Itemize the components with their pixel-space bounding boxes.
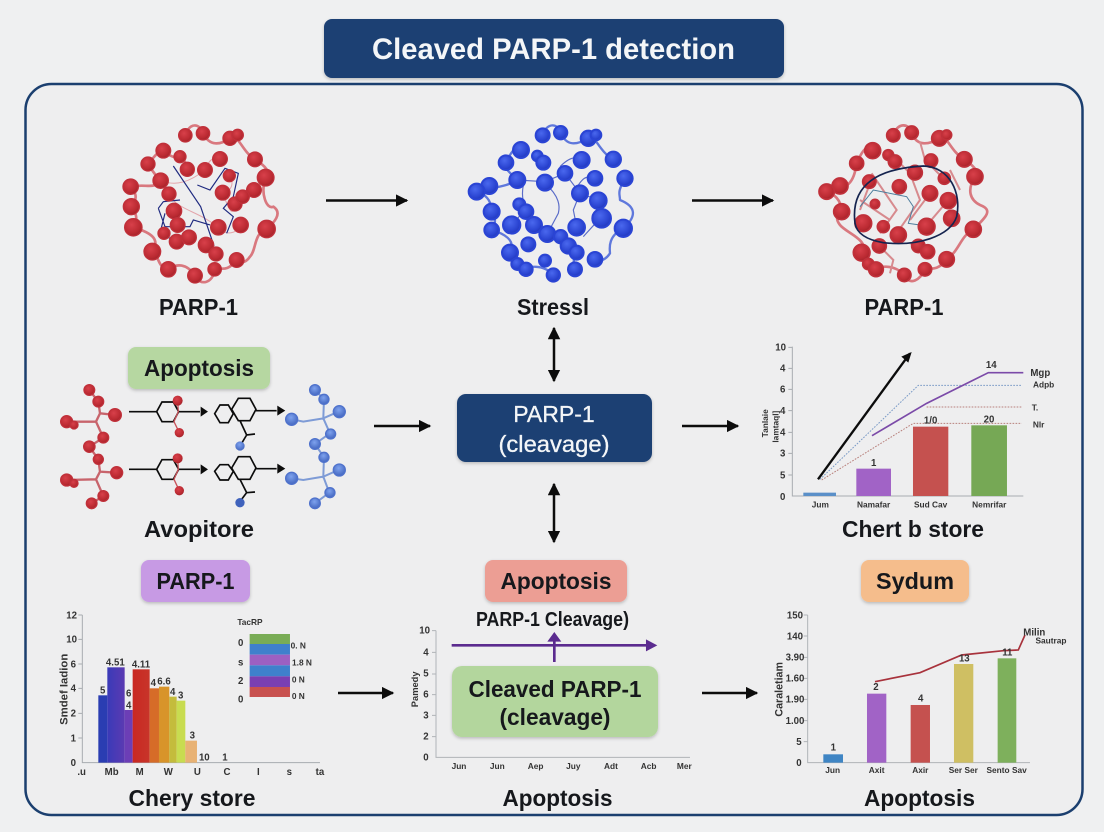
legend: 0 <box>238 638 243 649</box>
chart: bottom right bars: 3.90 <box>786 653 804 664</box>
chart: top right bar and line chart: 1/0 <box>924 415 937 426</box>
chart: bottom right bars: 0 <box>796 758 802 769</box>
box: Cleaved PARP-1 (cleavage): Cleaved PARP-1 <box>468 676 642 702</box>
chart: top right bar and line chart: Mgp <box>1030 368 1050 379</box>
chart: bottom right bars: Jun <box>825 765 840 775</box>
chart: rainbow bar chart with legend: 4 <box>126 701 132 712</box>
chart: rainbow bar chart with legend: C <box>223 767 230 778</box>
label: PARP-1 Cleavage): PARP-1 Cleavage) <box>476 609 629 631</box>
chart: rainbow bar chart with legend: 12 <box>66 610 77 621</box>
protein: red PARP-1 <box>123 125 278 283</box>
legend: 0 <box>238 695 243 706</box>
chart: rainbow bar chart with legend: Smdef Iadion <box>58 654 70 725</box>
chart: bottom right bars: Caraletiam <box>774 662 786 717</box>
chart: bottom right bars: Milin <box>1023 627 1045 638</box>
chart: bottom right bars: Ser Ser <box>949 765 979 775</box>
chart: rainbow bar chart with legend: Mb <box>105 767 119 778</box>
molecule pathway <box>61 385 345 509</box>
chart: top right bar and line chart <box>760 343 1054 509</box>
chart: rainbow bar chart with legend: .u <box>77 767 86 778</box>
chart: bottom right bars: Sautrap <box>1035 635 1066 645</box>
chart: rainbow bar chart with legend: 4 <box>170 687 176 698</box>
chart: bottom right bars: 1.00 <box>786 716 804 727</box>
pill: Sydum orange <box>861 560 969 602</box>
chart: rainbow bar chart with legend: 4.51 <box>106 657 125 668</box>
chart: bottom right bars: 2 <box>873 682 879 693</box>
chart: top right bar and line chart: 6 <box>780 385 786 396</box>
chart: top right bar and line chart: 1 <box>871 458 877 469</box>
arrow: chart to cleaved <box>338 692 393 694</box>
pill: Sydum orange: Sydum <box>876 568 954 594</box>
pill: Apoptosis pink <box>485 560 627 602</box>
pill: PARP-1 purple <box>141 560 250 602</box>
chart: top right bar and line chart: Adpb <box>1033 380 1054 390</box>
title <box>324 19 784 78</box>
chart: cleaved axis and arrows: 10 <box>419 625 430 636</box>
chart: cleaved axis and arrows: 3 <box>423 710 429 721</box>
legend: 1.8 N <box>292 657 312 667</box>
chart: cleaved axis and arrows: Mer <box>677 761 692 771</box>
chart: top right bar and line chart: 4 <box>780 364 786 375</box>
chart: cleaved axis and arrows: Jun <box>490 761 505 771</box>
legend: TacRP <box>237 617 263 627</box>
chart: rainbow bar chart with legend: 10 <box>66 635 77 646</box>
red branched chain <box>61 385 123 509</box>
legend <box>237 617 312 706</box>
box: Cleaved PARP-1 (cleavage) <box>452 666 658 737</box>
reaction rows <box>129 398 277 501</box>
legend: 0. N <box>291 641 306 651</box>
chart: cleaved axis and arrows: Pamedy <box>410 671 420 707</box>
label: Chert b store: Chert b store <box>842 516 984 542</box>
chart: cleaved axis and arrows: 4 <box>423 647 429 658</box>
chart: rainbow bar chart with legend: 0 <box>71 758 76 769</box>
chart: cleaved axis and arrows: 2 <box>423 731 429 742</box>
chart: bottom right bars: 1.60 <box>786 674 804 685</box>
protein: blue stress <box>469 125 633 282</box>
chart: top right bar and line chart: 4 <box>780 406 786 417</box>
chart: top right bar and line chart: 5 <box>780 470 786 481</box>
chart: rainbow bar chart with legend: 3 <box>190 731 196 742</box>
arrow: top left <box>326 199 407 202</box>
chart: cleaved axis and arrows <box>410 625 692 771</box>
legend: s <box>238 658 243 669</box>
chart: bottom right bars: Axit <box>869 765 885 775</box>
protein: red PARP-1 cleaved <box>819 125 987 282</box>
chart: bottom right bars: 11 <box>1002 647 1013 658</box>
chart: bottom right bars <box>774 611 1066 775</box>
pill: Apoptosis green <box>128 347 270 389</box>
label: Apoptosis right: Apoptosis <box>864 785 975 811</box>
legend: 2 <box>238 676 243 687</box>
chart: top right bar and line chart: Nlr <box>1033 419 1045 429</box>
arrow: stress to cleavage <box>553 328 555 381</box>
pill: Apoptosis pink: Apoptosis <box>500 568 612 594</box>
label: Avopitore: Avopitore <box>144 516 254 542</box>
chart: cleaved axis and arrows: 0 <box>423 753 429 764</box>
chart: bottom right bars: 5 <box>796 737 802 748</box>
chart: bottom right bars: Sento Sav <box>987 765 1027 775</box>
chart: rainbow bar chart with legend: s <box>287 767 292 778</box>
title: Cleaved PARP-1 detection <box>372 33 735 66</box>
chart: rainbow bar chart with legend: 6.6 <box>157 677 171 688</box>
chart: top right bar and line chart: 14 <box>986 360 997 371</box>
chart: top right bar and line chart: 4 <box>780 428 786 439</box>
chart: bottom right bars: 140 <box>787 631 803 642</box>
chart: rainbow bar chart with legend: 10 <box>199 753 210 764</box>
chart: top right bar and line chart: 10 <box>775 343 786 354</box>
chart: cleaved axis and arrows: 5 <box>423 669 429 680</box>
chart: cleaved axis and arrows: Acb <box>641 761 657 771</box>
chart: rainbow bar chart with legend: ta <box>316 767 325 778</box>
chart: cleaved axis and arrows: 6 <box>423 690 429 701</box>
label: Stressl: Stressl <box>517 294 589 320</box>
chart: bottom right bars: 1.90 <box>786 695 804 706</box>
chart: rainbow bar chart with legend: 2 <box>71 709 76 720</box>
chart: rainbow bar chart with legend <box>58 610 325 778</box>
chart: top right bar and line chart: Namafar <box>857 499 891 509</box>
arrow: top right <box>692 199 773 202</box>
arrow: molecules to cleavage <box>374 425 430 427</box>
box: PARP-1 cleavage: PARP-1 <box>513 401 595 427</box>
arrow: cleaved to apoptosis chart <box>702 692 757 694</box>
chart: top right bar and line chart: Tanlaie <box>760 409 770 437</box>
legend: 0 N <box>292 691 305 701</box>
label: Chery store: Chery store <box>128 785 256 811</box>
chart: top right bar and line chart: Sud Cav <box>914 499 948 509</box>
pill: PARP-1 purple: PARP-1 <box>156 568 235 594</box>
legend: 0 N <box>292 675 305 685</box>
chart: cleaved axis and arrows: Adt <box>604 761 618 771</box>
chart: top right bar and line chart: Jum <box>812 499 829 509</box>
chart: cleaved axis and arrows: Jun <box>452 761 466 771</box>
chart: top right bar and line chart: 3 <box>780 449 786 460</box>
chart: rainbow bar chart with legend: 1 <box>71 733 77 744</box>
chart: bottom right bars: 150 <box>787 611 803 622</box>
chart: bottom right bars: 13 <box>959 653 970 664</box>
chart: rainbow bar chart with legend: 6 <box>126 689 132 700</box>
arrow: cleavage to chart <box>682 425 738 427</box>
chart: rainbow bar chart with legend: 4 <box>151 678 157 689</box>
chart: rainbow bar chart with legend: 4.11 <box>132 660 151 671</box>
chart: rainbow bar chart with legend: 5 <box>100 685 106 696</box>
chart: top right bar and line chart: Nemrifar <box>972 499 1007 509</box>
box: PARP-1 cleavage: (cleavage) <box>498 431 610 457</box>
arrow: cleavage to apoptosis <box>553 484 555 542</box>
chart: rainbow bar chart with legend: U <box>194 767 201 778</box>
label: Apoptosis middle: Apoptosis <box>502 785 612 811</box>
chart: rainbow bar chart with legend: 1 <box>222 753 228 764</box>
chart: rainbow bar chart with legend: 3 <box>178 690 184 701</box>
blue branched chain <box>286 385 345 509</box>
label: PARP-1: PARP-1 <box>159 294 238 320</box>
chart: cleaved axis and arrows: Juy <box>566 761 581 771</box>
label: PARP-1 right: PARP-1 <box>864 294 944 320</box>
chart: rainbow bar chart with legend: M <box>136 767 144 778</box>
chart: top right bar and line chart: lamtaql] <box>771 410 781 443</box>
chart: rainbow bar chart with legend: 4 <box>71 684 77 695</box>
pill: Apoptosis green: Apoptosis <box>144 355 254 381</box>
chart: bottom right bars: Axir <box>912 765 929 775</box>
box: Cleaved PARP-1 (cleavage): (cleavage) <box>500 704 610 730</box>
chart: top right bar and line chart: 0 <box>780 492 785 503</box>
box: PARP-1 cleavage <box>457 394 652 462</box>
chart: rainbow bar chart with legend: I <box>257 767 260 778</box>
chart: bottom right bars: 1 <box>831 743 837 754</box>
chart: bottom right bars: 4 <box>918 693 924 704</box>
chart: rainbow bar chart with legend: 6 <box>71 659 77 670</box>
chart: top right bar and line chart: T. <box>1032 402 1038 412</box>
chart: rainbow bar chart with legend: W <box>164 767 174 778</box>
chart: cleaved axis and arrows: Aep <box>528 761 544 771</box>
chart: top right bar and line chart: 20 <box>984 415 994 426</box>
